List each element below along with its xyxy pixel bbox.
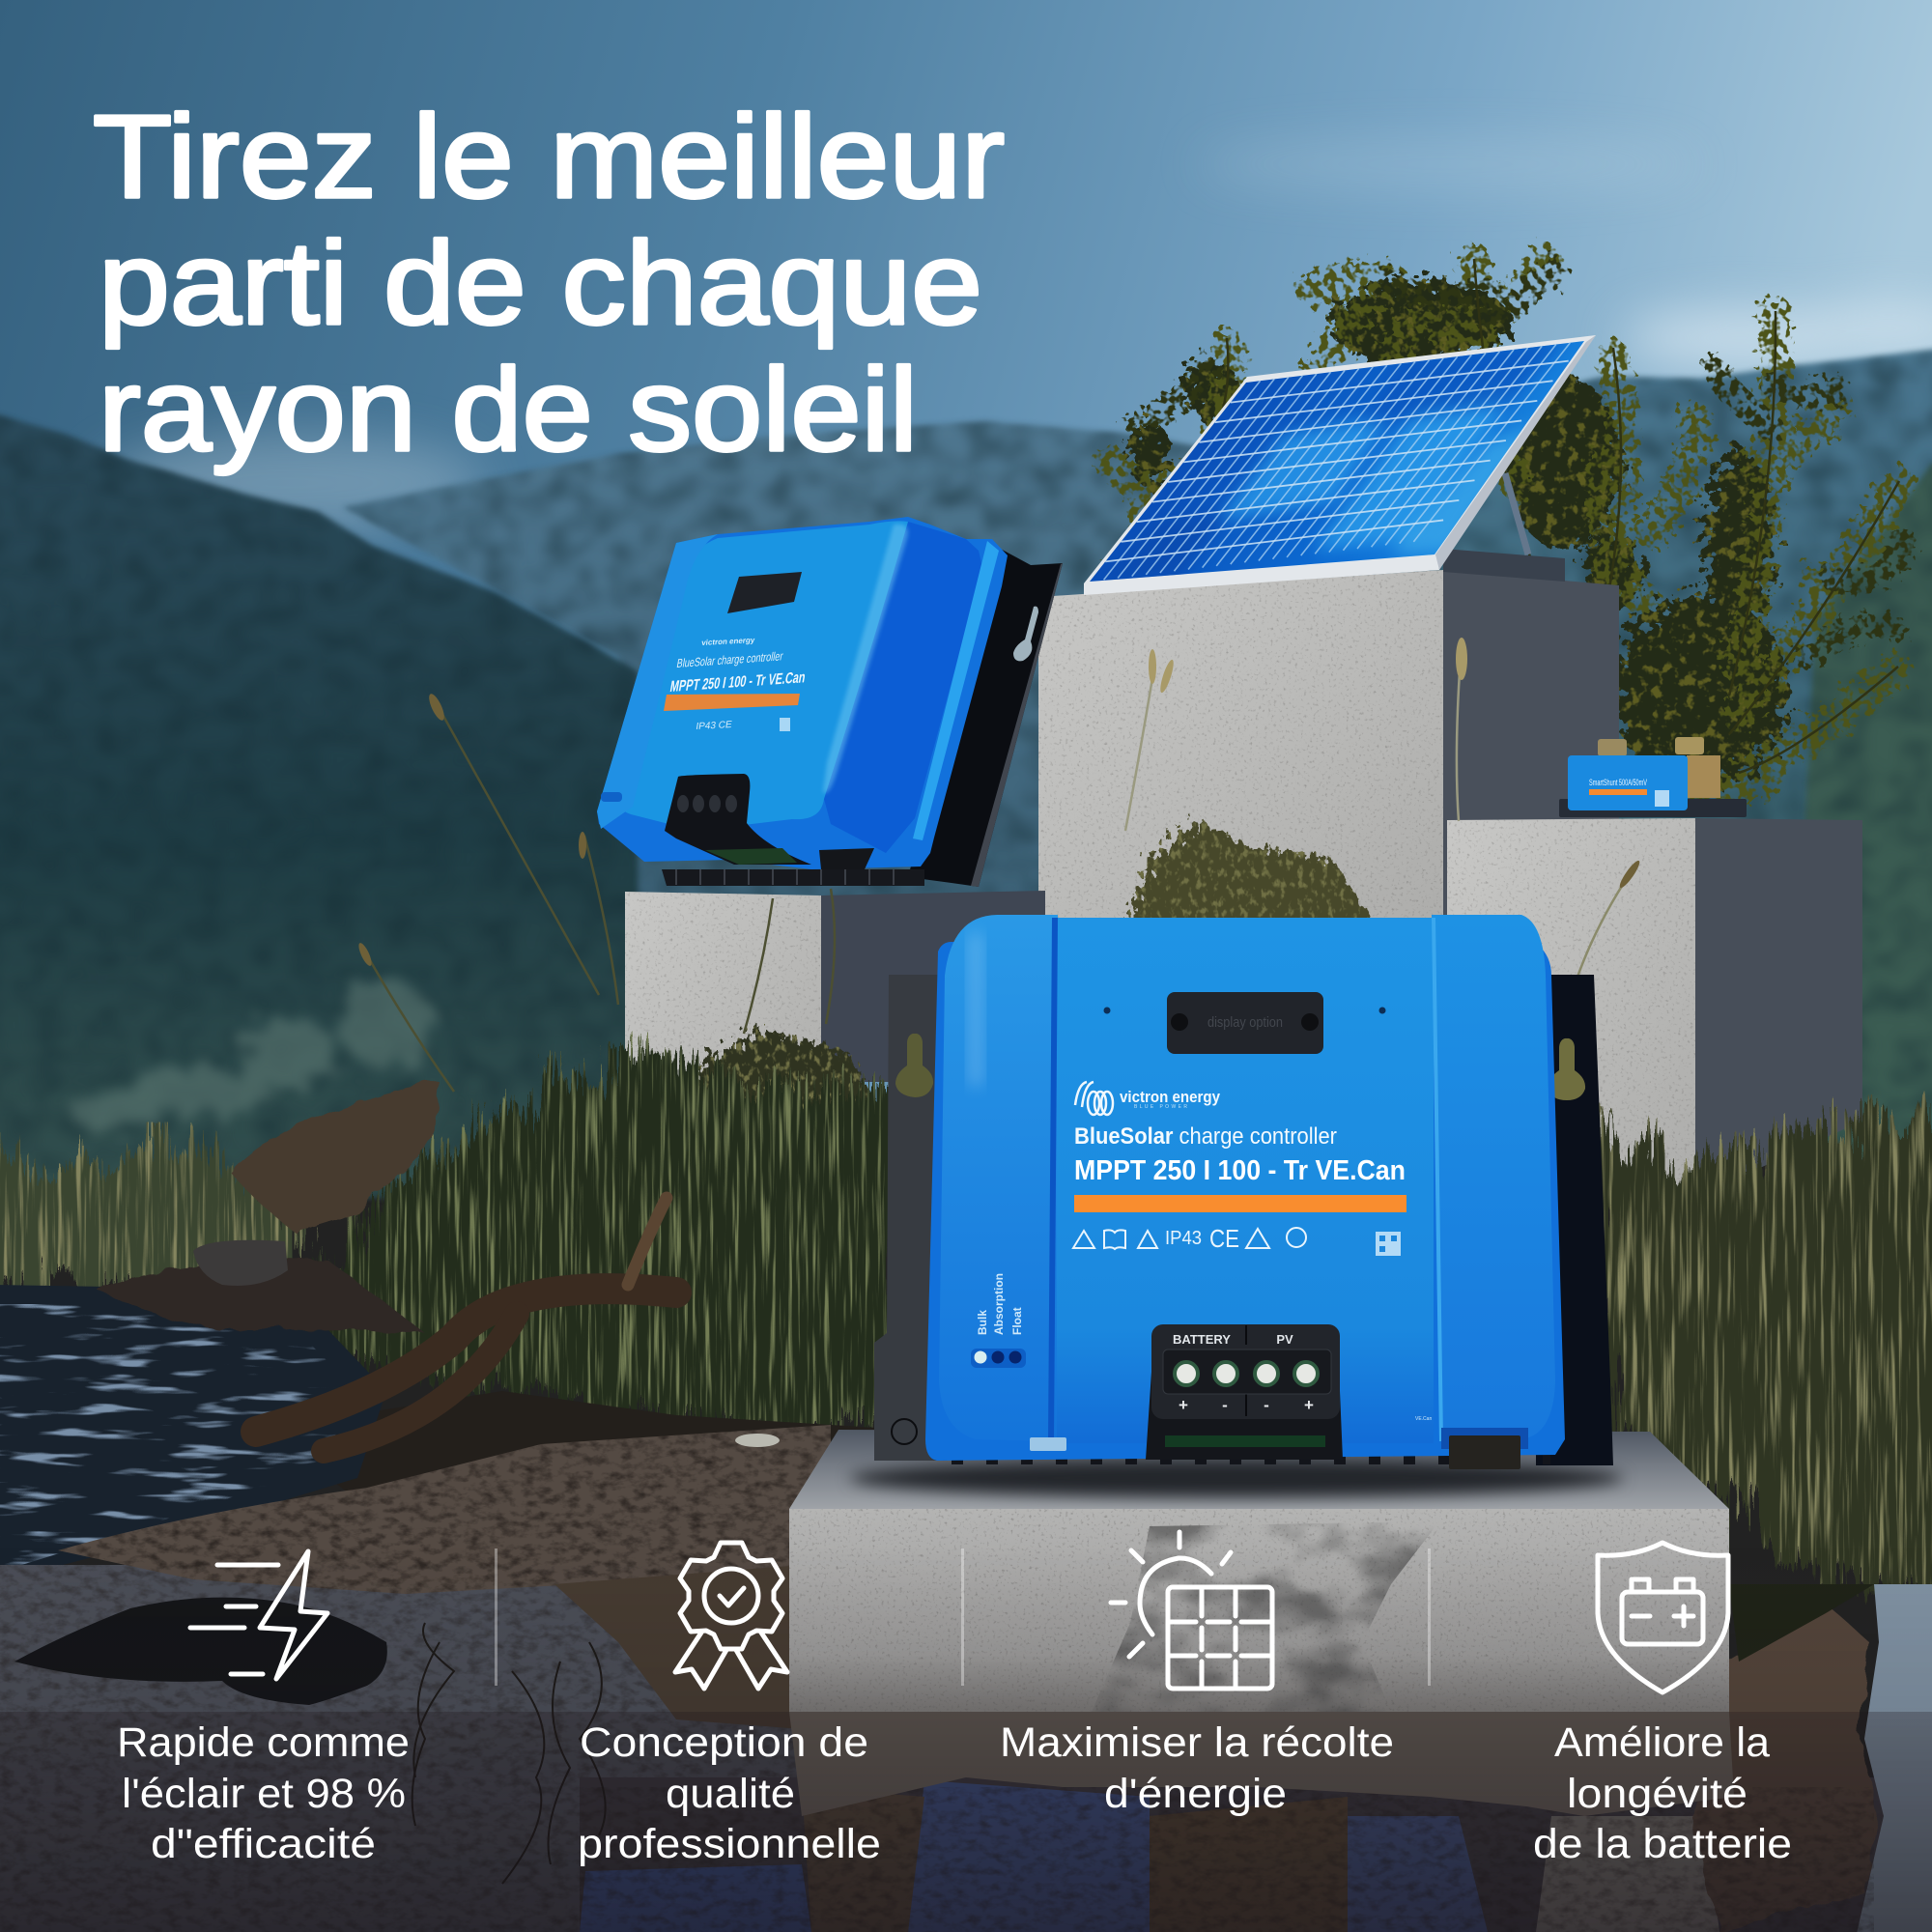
water left: [0, 1285, 386, 1584]
solar panel: [1084, 335, 1596, 595]
caption: harvest: d'énergie: [1104, 1771, 1287, 1817]
bracket keyhole: [1013, 607, 1038, 661]
terminal box: PV: [1276, 1332, 1293, 1347]
mud bank: [58, 1425, 831, 1594]
sky background: [0, 0, 1932, 1159]
right seam: [1434, 918, 1441, 1441]
block side face: [1443, 570, 1619, 927]
left side panel: [939, 915, 1058, 1441]
reflection texture: [580, 1787, 1874, 1932]
driftwood: [256, 1198, 676, 1451]
slab top: [789, 1430, 1729, 1509]
right side panel: [1432, 915, 1555, 1439]
body silhouette: [597, 517, 1008, 869]
right side face: [824, 522, 982, 853]
concrete block: right: [1447, 818, 1862, 1198]
caption: harvest: Maximiser la récolte: [1000, 1719, 1394, 1766]
caption: speed: [117, 1719, 410, 1867]
orange stripe: [1074, 1195, 1406, 1212]
shaded shore behind driftwood: [290, 1391, 908, 1507]
slab reflection: [789, 1712, 1734, 1816]
left keyhole: [895, 1034, 933, 1097]
grass: right: [1584, 1111, 1932, 1594]
LED labels: Absorption: [992, 1273, 1006, 1335]
caption: battery life: de la batterie: [1533, 1821, 1792, 1867]
icon: shield with battery: [1598, 1543, 1728, 1692]
icon row: IP43 CE: [696, 720, 733, 732]
terminal box: [1146, 1324, 1343, 1460]
grass seed heads: [356, 638, 1642, 967]
divider 2: [961, 1548, 964, 1686]
LED labels: [976, 1273, 1024, 1335]
slab weathering: [1092, 1521, 1439, 1712]
divider 1: [495, 1548, 497, 1686]
left side panel: [597, 534, 718, 829]
caption: quality: [578, 1719, 881, 1867]
panel cells: [1090, 341, 1584, 582]
green connector: [705, 848, 797, 865]
slab front: [789, 1509, 1729, 1712]
brown boulder: [232, 1082, 440, 1232]
caption: harvest: [1000, 1719, 1394, 1817]
terminal holes: [677, 795, 737, 812]
tree behind the panel: [1111, 259, 1903, 794]
QR code: [1376, 1232, 1401, 1256]
leafy branches: [1111, 261, 1903, 794]
IP43 CE: IP43: [1165, 1228, 1202, 1249]
reflection: brown patches: [1150, 1797, 1348, 1932]
display option plate: [1167, 992, 1323, 1054]
icon: lightning bolt: [190, 1551, 327, 1679]
rear mounting bracket: [908, 546, 1063, 887]
right bracket: [1536, 975, 1613, 1465]
panel frame: [1084, 335, 1596, 595]
terminal box: BATTERY: [1173, 1332, 1231, 1347]
icon: quality badge: [675, 1543, 787, 1689]
logo text: victron energy: [701, 636, 755, 647]
branch stems: [1179, 259, 1899, 773]
block front face: [1038, 570, 1443, 927]
lower water: [0, 1565, 802, 1932]
concrete block: large: [1038, 570, 1619, 927]
shunt label: SmartShunt 500A/50mV: [1589, 778, 1647, 787]
caption: battery life: [1533, 1719, 1792, 1867]
panel support bracket: [1443, 549, 1565, 582]
LED labels: Bulk: [976, 1310, 989, 1335]
caption: quality: professionnelle: [578, 1821, 881, 1867]
left highlight: [969, 932, 982, 1087]
shunt orange strip: [1589, 789, 1647, 795]
right keyhole: [1548, 1038, 1585, 1100]
main charge controller: [874, 915, 1613, 1469]
icon: sun and solar panel: [1111, 1532, 1272, 1689]
panel cell grid: [1090, 341, 1584, 582]
caption: speed: l'éclair et 98 %: [122, 1771, 406, 1817]
foliage mass: [1128, 280, 1787, 787]
product text: BlueSolar charge controller: [675, 649, 784, 670]
main charge controller: CE: [1209, 1224, 1239, 1253]
left seam: [1051, 918, 1055, 1441]
title: [93, 91, 1005, 475]
LEDs: [601, 792, 622, 802]
cyan edge: [913, 541, 999, 840]
small rock: [193, 1240, 288, 1286]
far mountains right: [1246, 350, 1932, 1159]
grass stalks: [362, 657, 1633, 1092]
dark grass reflection: [1729, 1584, 1874, 1662]
LED labels: Float: [1010, 1307, 1024, 1335]
clouds and haze: [97, 139, 1932, 531]
caption: battery life: Améliore la: [1554, 1719, 1770, 1766]
shunt brass terminals: [1598, 739, 1627, 756]
title: parti de chaque: [99, 217, 982, 349]
flange: [925, 942, 1565, 1461]
reflections bottom: brown bank: [554, 1565, 802, 1729]
caption: battery life: longévité: [1567, 1771, 1747, 1817]
brand tagline: BLUE POWER: [1134, 1104, 1189, 1110]
VE.Can connector: [1415, 1416, 1528, 1469]
base slab: [789, 1430, 1734, 1816]
stalk reflections: [412, 1623, 606, 1884]
upper charge controller: [597, 517, 1063, 887]
heat sink feet: [952, 1453, 1550, 1464]
display plate: [727, 572, 802, 613]
shunt QR: [1655, 790, 1669, 807]
terminal box: -: [1264, 1396, 1269, 1414]
reflection: right brown rock: [1690, 1604, 1879, 1932]
SmartShunt device: [1559, 737, 1747, 817]
title: rayon de soleil: [99, 344, 918, 475]
brand text: victron energy: [1120, 1088, 1220, 1106]
front face: [615, 521, 908, 831]
screw dots: [1103, 1007, 1111, 1014]
victron logo mark: [1075, 1082, 1113, 1115]
fuse holder: [1030, 1437, 1066, 1451]
overlay band: [0, 1712, 1932, 1932]
model name: MPPT 250 I 100 - Tr VE.Can: [1074, 1155, 1406, 1186]
far mountains centre: [343, 421, 1275, 918]
VE.Can connector: VE.Can: [1415, 1416, 1432, 1422]
grass: centre: [290, 1043, 908, 1439]
dark rock left: [14, 1598, 387, 1705]
small white stone: [735, 1434, 780, 1447]
terminal box: +: [1179, 1396, 1188, 1414]
right water: [1855, 1584, 1932, 1932]
caption: quality: qualité: [666, 1771, 795, 1817]
model text: MPPT 250 I 100 - Tr VE.Can: [668, 668, 807, 696]
heat sink fins: [662, 869, 924, 886]
display option plate: display option: [1208, 1014, 1283, 1031]
divider 3: [1428, 1548, 1431, 1686]
caption: speed: Rapide comme: [117, 1719, 410, 1766]
green slope right: [1787, 464, 1932, 1159]
misty trees on left mountain: [68, 980, 435, 1130]
reflection: mid bottom: [580, 1777, 1893, 1932]
shunt base: [1559, 799, 1747, 817]
terminal box: -: [1222, 1396, 1228, 1414]
caption: speed: d"efficacité: [151, 1821, 376, 1867]
highlight band: [823, 525, 908, 793]
left mountain: [0, 406, 638, 1198]
ground symbol: [892, 1419, 917, 1444]
caption: quality: Conception de: [580, 1719, 868, 1766]
main controller shadow: [850, 1459, 1623, 1497]
lower water texture: [0, 1565, 802, 1932]
shunt body: [1568, 755, 1688, 810]
terminal box: +: [1304, 1396, 1314, 1414]
water ripples: [0, 1304, 357, 1575]
reflection: blue patches: [908, 1780, 1150, 1932]
moss on left block: [667, 1029, 894, 1140]
title: Tirez le meilleur: [93, 91, 1005, 222]
LED strip: [971, 1349, 1026, 1368]
product name: BlueSolar charge controller: [1074, 1123, 1337, 1150]
centre panel: [1057, 918, 1434, 1443]
panel strut: [1505, 473, 1528, 554]
terminal block: [665, 774, 811, 865]
mud near rock: [97, 1259, 425, 1333]
side connector: [819, 848, 874, 869]
moss on large block: [1125, 821, 1377, 927]
left bracket: [874, 975, 947, 1461]
bottom overlay: [0, 1546, 1932, 1932]
grass: far left: [0, 1145, 299, 1294]
panel reflections: [1101, 338, 1565, 580]
certification marks: [1073, 1228, 1306, 1249]
orange stripe: [664, 694, 800, 711]
concrete block: left: [625, 891, 1045, 1140]
